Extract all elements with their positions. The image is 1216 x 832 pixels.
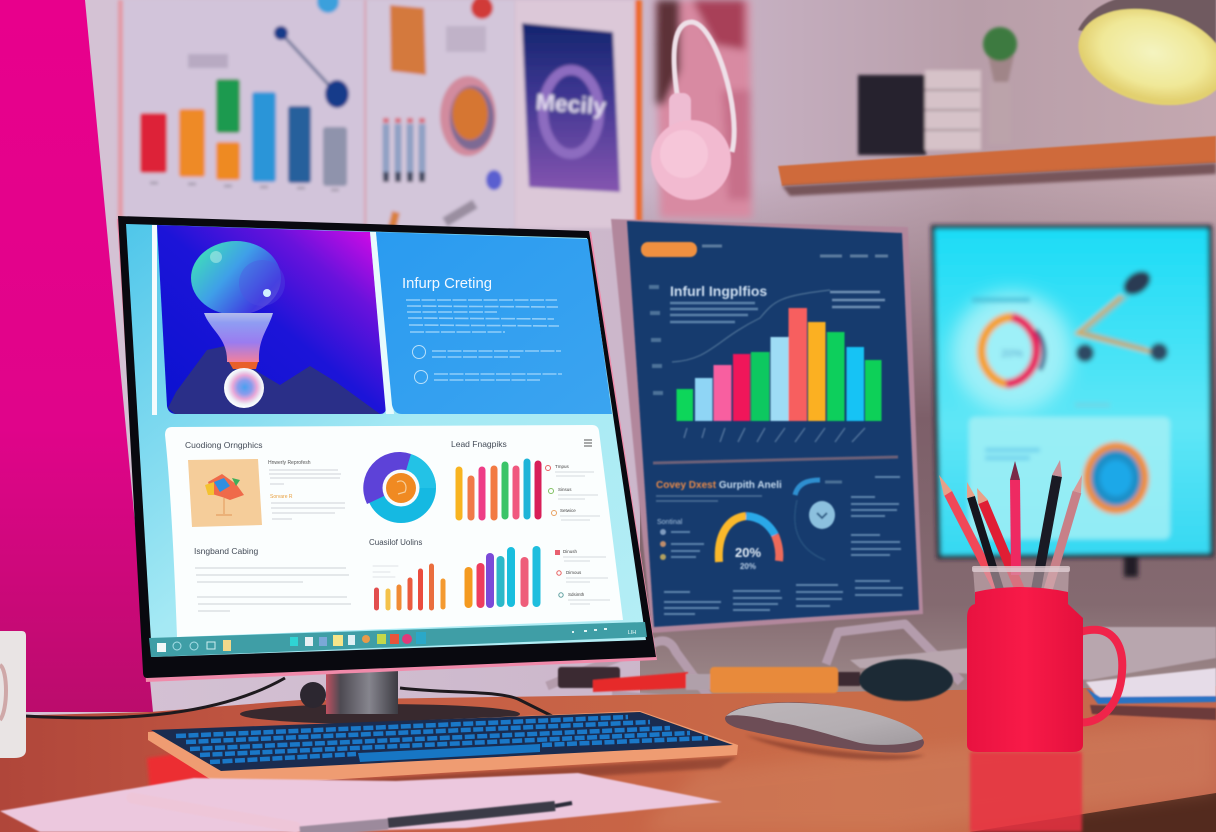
panel title: Infurp Creting: [402, 275, 492, 292]
dark infographic monitor: [547, 219, 961, 702]
red pencil: [977, 488, 1020, 590]
chart two legend: [555, 549, 610, 604]
foreground monitor: [117, 216, 657, 682]
lower heading: Covey Dxest Gurpith Aneli: [656, 480, 782, 491]
mug body: [967, 587, 1083, 752]
section divider: [653, 457, 898, 463]
gauge legend: Sontinal: [657, 519, 683, 526]
lower wall shading: [640, 180, 1216, 710]
dark pencil: [1036, 460, 1062, 590]
text heading lower: Isngband Cabing: [194, 546, 259, 556]
right wall monitor: 20%: [1001, 348, 1023, 360]
bulb head: [191, 241, 281, 315]
keyboard: [148, 711, 738, 786]
glass orb: [224, 368, 264, 408]
paper sheet: [0, 773, 722, 832]
dashboard heading right: Lead Fnagpiks: [451, 439, 507, 449]
orange pill tab: [641, 242, 697, 257]
monitor stand and base: [240, 670, 520, 724]
dark pen: [300, 803, 572, 832]
large bar chart: [468, 550, 536, 604]
bar chart one: [459, 462, 538, 517]
keyboard frame: [148, 711, 738, 786]
red mug reflection: [970, 752, 1082, 832]
bottom text columns: [664, 581, 903, 614]
pencils: [939, 460, 1082, 590]
shelf board: [778, 136, 1216, 186]
white dashboard panel: [165, 425, 623, 637]
keyboard deck: [151, 712, 733, 771]
blue title panel: [370, 232, 612, 414]
menu icon: [584, 440, 592, 446]
mouse body: [725, 702, 924, 753]
keyboard key rows: [176, 717, 708, 762]
x axis labels: [684, 428, 865, 442]
panel paragraph: [406, 300, 559, 332]
dark infographic monitor: 20%: [740, 562, 756, 571]
mug handle: [1076, 630, 1122, 722]
taskbar center icons: [290, 632, 426, 646]
bulb neck: [204, 313, 273, 362]
mouse: [725, 702, 924, 753]
glass rim: [973, 568, 1069, 595]
chart two legend: Dimous: [566, 570, 582, 575]
dashboard heading left: Cuodiong Orngphics: [185, 440, 262, 450]
circular dial: [795, 480, 842, 560]
card caption text: [268, 460, 345, 519]
panel icons: [412, 346, 426, 358]
chart title: Infurl Ingplfios: [670, 283, 767, 299]
card caption text: Sorvare R: [270, 494, 293, 500]
white mug at left: [0, 631, 26, 758]
desk: [0, 686, 1216, 832]
notebooks right: [850, 627, 1216, 720]
illustration card: [188, 459, 262, 527]
light donut halo: [952, 292, 1072, 412]
monitor frame: [611, 219, 923, 633]
card caption text: Hnwerly Reprofesh: [268, 460, 311, 466]
wall poster: portrait: [655, 0, 752, 218]
shelf with objects: [778, 27, 1216, 196]
shelf objects: [858, 27, 1017, 155]
bulb base: [229, 362, 258, 369]
taskbar left icons: [157, 640, 231, 652]
chart one legend: [546, 464, 600, 520]
spacebar: [358, 744, 540, 762]
hero panel: light bulb: [152, 225, 386, 415]
wall poster: purple title poster: [515, 0, 642, 228]
pencil cup: [939, 460, 1122, 752]
pink pencil: [1010, 461, 1020, 575]
chart two legend: Sdsimth: [568, 592, 585, 597]
paper with pens: [0, 773, 722, 832]
magenta wall panel: [0, 0, 153, 712]
coral pencil: [939, 475, 998, 590]
trend lines: [672, 290, 830, 362]
desk sheen: [640, 720, 1216, 832]
monitor screen: [627, 221, 919, 627]
wall poster: notes and pins: [367, 0, 515, 228]
keyboard reflection: [147, 752, 230, 790]
taskbar clock: LIH: [628, 630, 636, 636]
mouse top shell: [726, 703, 923, 745]
black pencil: [967, 482, 1000, 590]
scooter illustration: [1076, 266, 1168, 362]
bar chart: [676, 308, 882, 421]
tool with dark ball: [558, 659, 953, 701]
dusty pencil: [1048, 475, 1082, 590]
screen background: [126, 224, 646, 657]
monitor pink rim: [117, 219, 657, 682]
mouse shadow: [745, 735, 925, 760]
chart one legend: Sinsus: [558, 487, 572, 492]
right wall monitor: [931, 225, 1214, 577]
side text blocks: [851, 477, 901, 555]
taskbar clock: [572, 629, 636, 636]
semicircle gauge: [719, 516, 779, 562]
monitor stand: [1124, 555, 1138, 577]
panel bullet text: [432, 351, 562, 380]
stand legs: [547, 624, 961, 702]
chart caption lines: [670, 303, 758, 322]
donut wheel: [363, 452, 436, 523]
wall poster: bar chart: [118, 0, 367, 228]
pink speaker with cord: [651, 22, 734, 200]
pink pen: [132, 798, 295, 827]
lower card: [969, 417, 1170, 539]
wall poster: purple title poster: Mecily: [535, 89, 607, 119]
blue orange dial: [1083, 442, 1149, 514]
monitor bezel: [118, 216, 656, 678]
gauge values: 20%: [735, 545, 761, 560]
chart two heading: Cuasilof Uolins: [369, 538, 422, 547]
donut chart: [982, 317, 1044, 384]
monitor cable: [25, 678, 552, 718]
chart axis labels: [649, 287, 663, 393]
keyboard shadow: [230, 757, 737, 795]
chart one legend: Setwice: [560, 508, 576, 513]
small bar chart: [373, 566, 443, 608]
chart two legend: Dinush: [563, 549, 578, 554]
mountains: [168, 346, 380, 414]
ceiling lamp: [1068, 0, 1216, 120]
chart one legend: Tmpus: [555, 464, 570, 469]
taskbar: [149, 622, 647, 657]
desk front dark edge: [970, 793, 1216, 832]
text paragraphs: [195, 568, 351, 611]
top nav labels: [702, 246, 888, 256]
